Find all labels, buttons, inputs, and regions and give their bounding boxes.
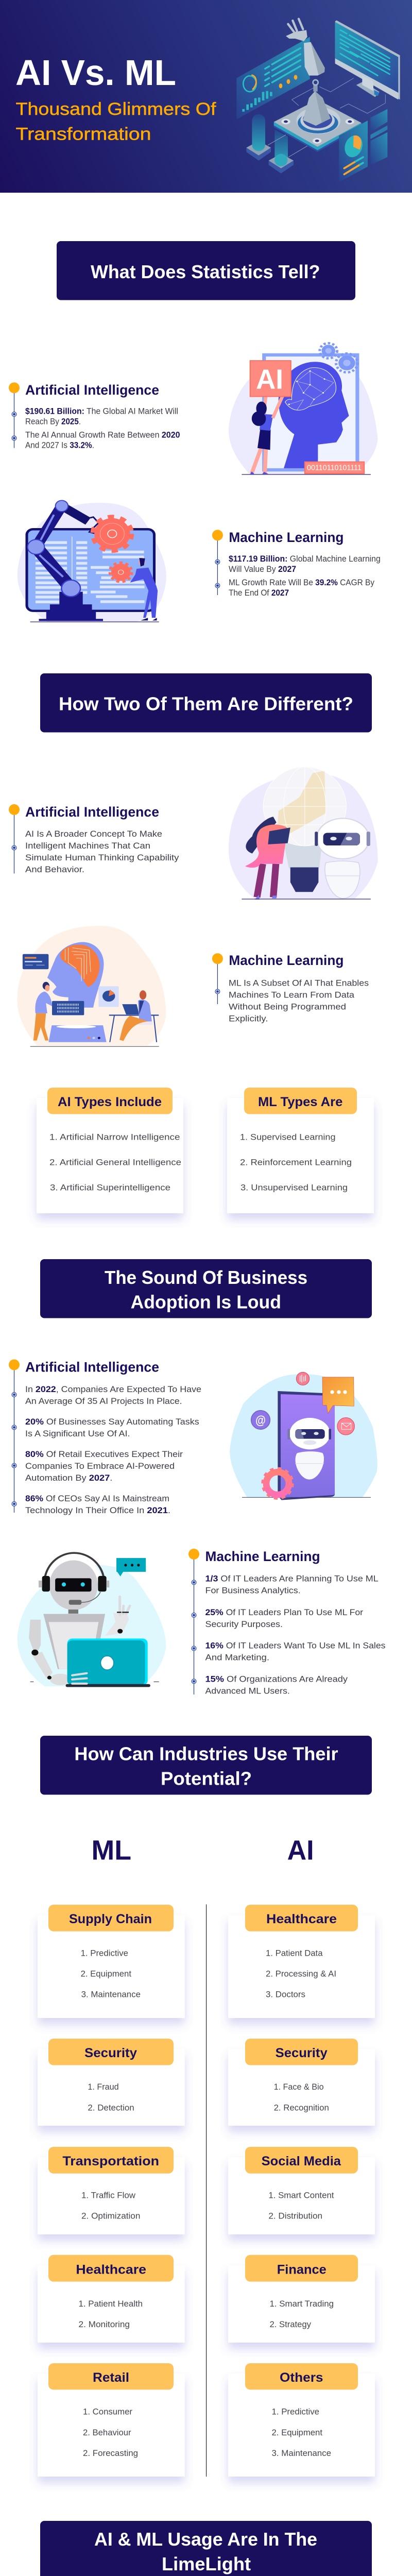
card: ML Supply Chain: 1. Predictive [81,1948,128,1958]
card: ML Retail: 1. Consumer [83,2407,132,2417]
card: AI Security: 1. Face & Bio [274,2082,324,2092]
list: 2. Artificial General Intelligence [49,1158,181,1167]
card: AI Social Media: Social Media [262,2154,341,2168]
heading: How Can Industries Use Their Potential: How Can Industries Use Their [74,1743,338,1764]
illustration: robot with headset and laptop [18,1553,166,1687]
card: AI Security: Security [276,2046,328,2060]
card: AI Others [228,2363,375,2477]
body text: $190.61 Billion: The Global AI Market Will [25,407,178,416]
card: AI Security [228,2039,375,2126]
card: ML Retail [38,2363,185,2477]
body text: Advanced ML Users. [205,1686,290,1696]
card: ML types [227,1088,374,1213]
illustration: robot arm platform with dashboards [236,19,400,182]
heading: How Can Industries Use Their Potential [40,1736,372,1795]
body text: And Marketing. [205,1653,269,1663]
body text: ML Is A Subset Of AI That Enables [229,978,369,988]
card: AI Healthcare: 2. Processing & AI [266,1969,336,1979]
card: ML Security: 1. Fraud [88,2082,119,2092]
heading: Machine Learning [205,1549,320,1564]
body text: And 2027 Is 33.2%. [25,441,94,450]
card: ML Security: Security [84,2046,137,2060]
list: 1. Artificial Narrow Intelligence [49,1132,180,1142]
card: AI Others: 1. Predictive [272,2407,319,2417]
body text: Technology In Their Office In 2021. [25,1505,170,1515]
body text: Without Being Programmed [229,1002,346,1011]
card: AI Others: 2. Equipment [272,2428,322,2437]
card: ML Transportation: 2. Optimization [81,2211,140,2221]
title: AI Vs. ML [15,53,176,93]
card: ML Supply Chain [38,1905,185,2018]
body text: The End Of 2027 [229,588,289,598]
body text: The AI Annual Growth Rate Between 2020 [25,431,180,440]
body text [205,1574,385,1696]
body text: Machines To Learn From Data [229,990,355,999]
body text: Is A Significant Use Of AI. [25,1429,130,1438]
card: ML Healthcare: Healthcare [76,2262,146,2277]
card: AI Finance: 1. Smart Trading [270,2299,334,2309]
body text: Explicitly. [229,1013,268,1023]
panel: statistics AI [9,382,180,450]
illustration: robot arm with gears and monitor [18,500,166,622]
illustration: phone with chat robot: @ [255,1413,266,1427]
card: AI Security: 2. Recognition [274,2103,329,2112]
tag [244,1088,357,1114]
body text: 86% Of CEOs Say AI Is Mainstream [25,1494,169,1503]
tag: AI Types Include [58,1095,162,1109]
list: 3. Artificial Superintelligence [50,1182,170,1192]
heading: The Sound Of Business Adoption Is Loud: The Sound Of Business [105,1267,307,1288]
card: ML Retail: 2. Forecasting [83,2448,138,2458]
heading: AI and ML Usage Are In The LimeLight [40,2521,372,2576]
card: AI Finance [228,2255,375,2343]
heading: How Two Of Them Are Different [40,673,372,733]
tag [47,1088,173,1114]
hero banner [0,0,412,193]
card: AI Social Media: 2. Distribution [268,2211,322,2221]
body text: 20% Of Businesses Say Automating Tasks [25,1417,199,1427]
body text: 16% Of IT Leaders Want To Use ML In Sales [205,1641,385,1651]
body text: 25% Of IT Leaders Plan To Use ML For [205,1607,363,1617]
card: AI Finance: 2. Strategy [270,2319,311,2329]
timeline [188,1549,199,1694]
body text: 1/3 Of IT Leaders Are Planning To Use ML [205,1574,379,1584]
illustration: AI head with brain network [229,343,378,474]
card: ML Healthcare: 1. Patient Health [78,2299,143,2309]
heading: AI and ML Usage Are In The LimeLight: LimeLight [162,2553,251,2574]
body text: An Average Of 35 AI Projects In Place. [25,1396,182,1406]
heading: AI and ML Usage Are In The LimeLight: AI & ML Usage Are In The [94,2529,317,2550]
card: ML Transportation [38,2147,185,2234]
body text: Will Value By 2027 [229,565,296,574]
subtitle: Transformation [15,125,151,144]
heading: What Does Statistics Tell [57,241,355,300]
timeline [9,1359,20,1513]
card: ML Retail: 2. Behaviour [83,2428,131,2437]
body text [25,407,180,450]
card: AI Others: 3. Maintenance [272,2448,331,2458]
panel: adoption AI [9,1359,201,1515]
illustration: people analysing orange brain head [17,926,166,1046]
body text: ML Growth Rate Will Be 39.2% CAGR By [229,578,375,587]
heading: Artificial Intelligence [25,382,159,398]
card: AI Social Media [228,2147,375,2234]
card: AI Others: Others [280,2370,323,2385]
card: AI Healthcare [228,1905,375,2018]
list [49,1132,181,1192]
timeline [9,382,20,448]
timeline [9,804,20,874]
timeline [212,530,223,595]
panel: statistics ML [212,530,381,598]
card: AI Healthcare: Healthcare [266,1912,337,1926]
timeline [212,953,223,1004]
body text: 80% Of Retail Executives Expect Their [25,1449,183,1459]
card: ML Security: 2. Detection [88,2103,134,2112]
illustration: AI head with brain network: 00110110101111 [307,464,362,472]
panel: machine learning definition [212,953,369,1023]
body text: Security Purposes. [205,1619,283,1629]
card: ML Healthcare [38,2255,185,2343]
list [240,1132,352,1192]
body text: $117.19 Billion: Global Machine Learning [229,554,381,564]
panel: adoption ML [188,1549,385,1696]
card: AI Social Media: 1. Smart Content [268,2191,334,2200]
body text [229,978,369,1023]
heading: The Sound Of Business Adoption Is Loud [40,1259,372,1318]
subtitle [15,99,216,144]
body text [25,829,179,874]
card: ML Retail: Retail [93,2370,129,2385]
body text: 15% Of Organizations Are Already [205,1674,348,1684]
heading: How Can Industries Use Their Potential: Potential? [161,1768,252,1789]
tag: ML Types Are [258,1095,342,1109]
illustration: woman with light bulb and robot [229,767,378,900]
body text [25,1384,201,1515]
column title: ML: ML [92,1835,131,1866]
card: AI Healthcare: 3. Doctors [266,1989,305,1999]
card: ML Healthcare: 2. Monitoring [78,2319,130,2329]
list: 3. Unsupervised Learning [241,1182,348,1192]
illustration: phone with chat robot [230,1372,377,1500]
heading: Machine Learning [229,953,344,968]
heading: Artificial Intelligence [25,1359,159,1375]
heading: The Sound Of Business Adoption Is Loud: Adoption Is Loud [131,1292,281,1313]
body text: And Behavior. [25,865,84,874]
card: ML Supply Chain: 3. Maintenance [81,1989,141,1999]
panel: definition AI [9,804,179,874]
list: 1. Supervised Learning [240,1132,336,1142]
card: ML Security [38,2039,185,2126]
card: AI Finance: Finance [277,2262,327,2277]
body text: In 2022, Companies Are Expected To Have [25,1384,201,1394]
heading: How Two Of Them Are Different: How Two Of Them Are Different? [59,693,353,715]
card: AI Healthcare: 1. Patient Data [266,1948,323,1958]
card: ML Transportation: Transportation [62,2154,159,2168]
body text: Intelligent Machines That Can [25,841,150,851]
list: 2. Reinforcement Learning [240,1158,352,1167]
body text: Reach By 2025. [25,417,81,427]
card: ML Supply Chain: Supply Chain [69,1912,152,1926]
subtitle: Thousand Glimmers Of [15,99,216,119]
body text: For Business Analytics. [205,1586,301,1596]
body text: Simulate Human Thinking Capability [25,853,179,862]
body text: Automation By 2027. [25,1473,112,1483]
heading: Artificial Intelligence [25,804,159,820]
body text: AI Is A Broader Concept To Make [25,829,162,839]
heading: Machine Learning [229,530,344,545]
heading: What Does Statistics Tell: What Does Statistics Tell? [91,261,320,282]
card: ML Transportation: 1. Traffic Flow [81,2191,136,2200]
column title: AI: AI [287,1835,314,1866]
illustration: AI head with brain network: AI [256,364,283,395]
body text [229,554,381,598]
card: AI types [37,1088,183,1213]
card: ML Supply Chain: 2. Equipment [81,1969,131,1979]
body text: Companies To Embrace AI-Powered [25,1461,175,1471]
